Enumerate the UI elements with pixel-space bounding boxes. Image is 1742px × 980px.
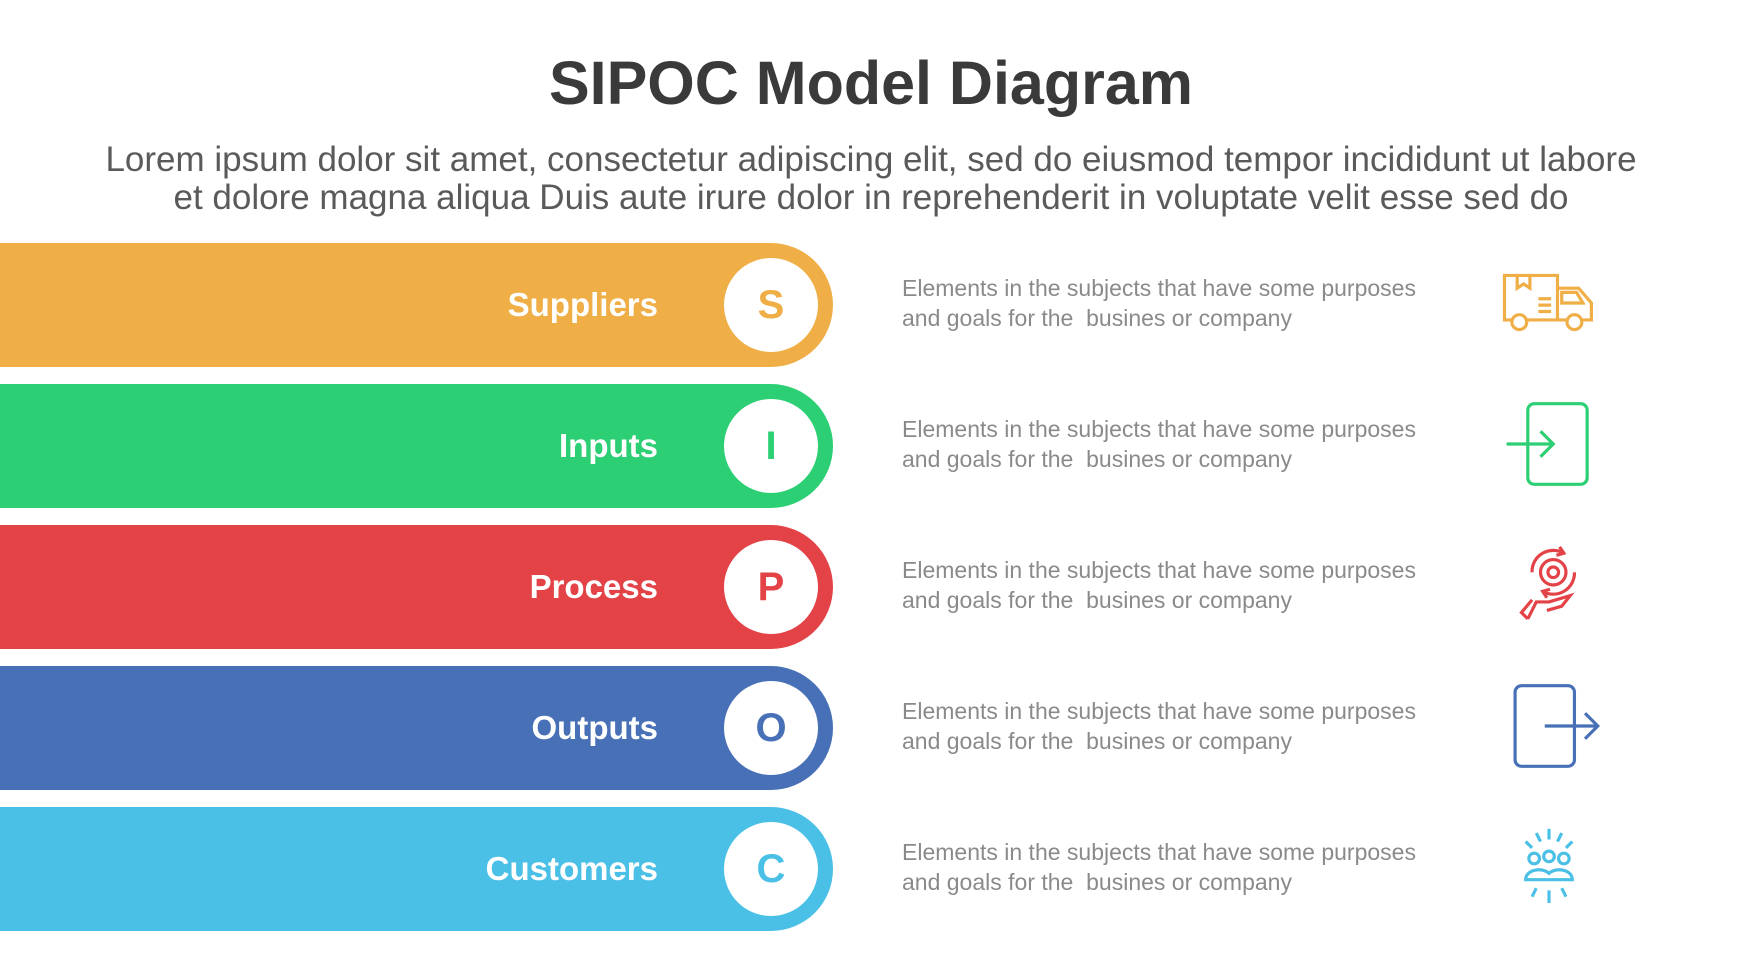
text: outputs: Elements in the subjects that have some purposes [902, 698, 1416, 724]
text: outputs: and goals for the busines or company [902, 728, 1292, 754]
bar: process: P [758, 565, 784, 609]
bar: inputs: I [765, 424, 777, 468]
text: inputs: and goals for the busines or company [902, 446, 1292, 472]
text: inputs [902, 416, 1416, 472]
bar: inputs [0, 384, 833, 508]
text: customers: Elements in the subjects that have some purposes [902, 839, 1416, 865]
subtitle [105, 140, 1637, 217]
icon: process [1519, 546, 1576, 620]
bar: outputs [0, 666, 833, 790]
bar: customers: Customers [486, 850, 658, 887]
bar: customers [0, 807, 833, 931]
text: customers [902, 839, 1416, 895]
bar: outputs: Outputs [532, 709, 658, 746]
subtitle: et dolore magna aliqua Duis aute irure dolor in reprehenderit in voluptate velit esse sed do [173, 178, 1568, 217]
subtitle: Lorem ipsum dolor sit amet, consectetur adipiscing elit, sed do eiusmod tempor incididunt ut labore [105, 140, 1637, 179]
text: process [902, 557, 1416, 613]
bar: suppliers [0, 243, 833, 367]
text: suppliers: and goals for the busines or company [902, 305, 1292, 331]
icon: truck [1502, 274, 1593, 332]
text: suppliers: Elements in the subjects that have some purposes [902, 275, 1416, 301]
bar: process: Process [530, 568, 658, 605]
icon: input [1506, 402, 1589, 486]
text: customers: and goals for the busines or company [902, 869, 1292, 895]
bar: suppliers: Suppliers [508, 286, 658, 323]
icon: output [1514, 684, 1600, 768]
icon: customers [1524, 828, 1574, 903]
text: process: Elements in the subjects that have some purposes [902, 557, 1416, 583]
text: inputs: Elements in the subjects that have some purposes [902, 416, 1416, 442]
text: outputs [902, 698, 1416, 754]
text: process: and goals for the busines or company [902, 587, 1292, 613]
bar: suppliers: S [758, 283, 784, 327]
bar: customers: C [757, 847, 785, 891]
bar: inputs: Inputs [559, 427, 658, 464]
title: SIPOC Model Diagram [549, 49, 1193, 117]
bar: outputs: O [755, 706, 787, 750]
text: suppliers [902, 275, 1416, 331]
bar: process [0, 525, 833, 649]
